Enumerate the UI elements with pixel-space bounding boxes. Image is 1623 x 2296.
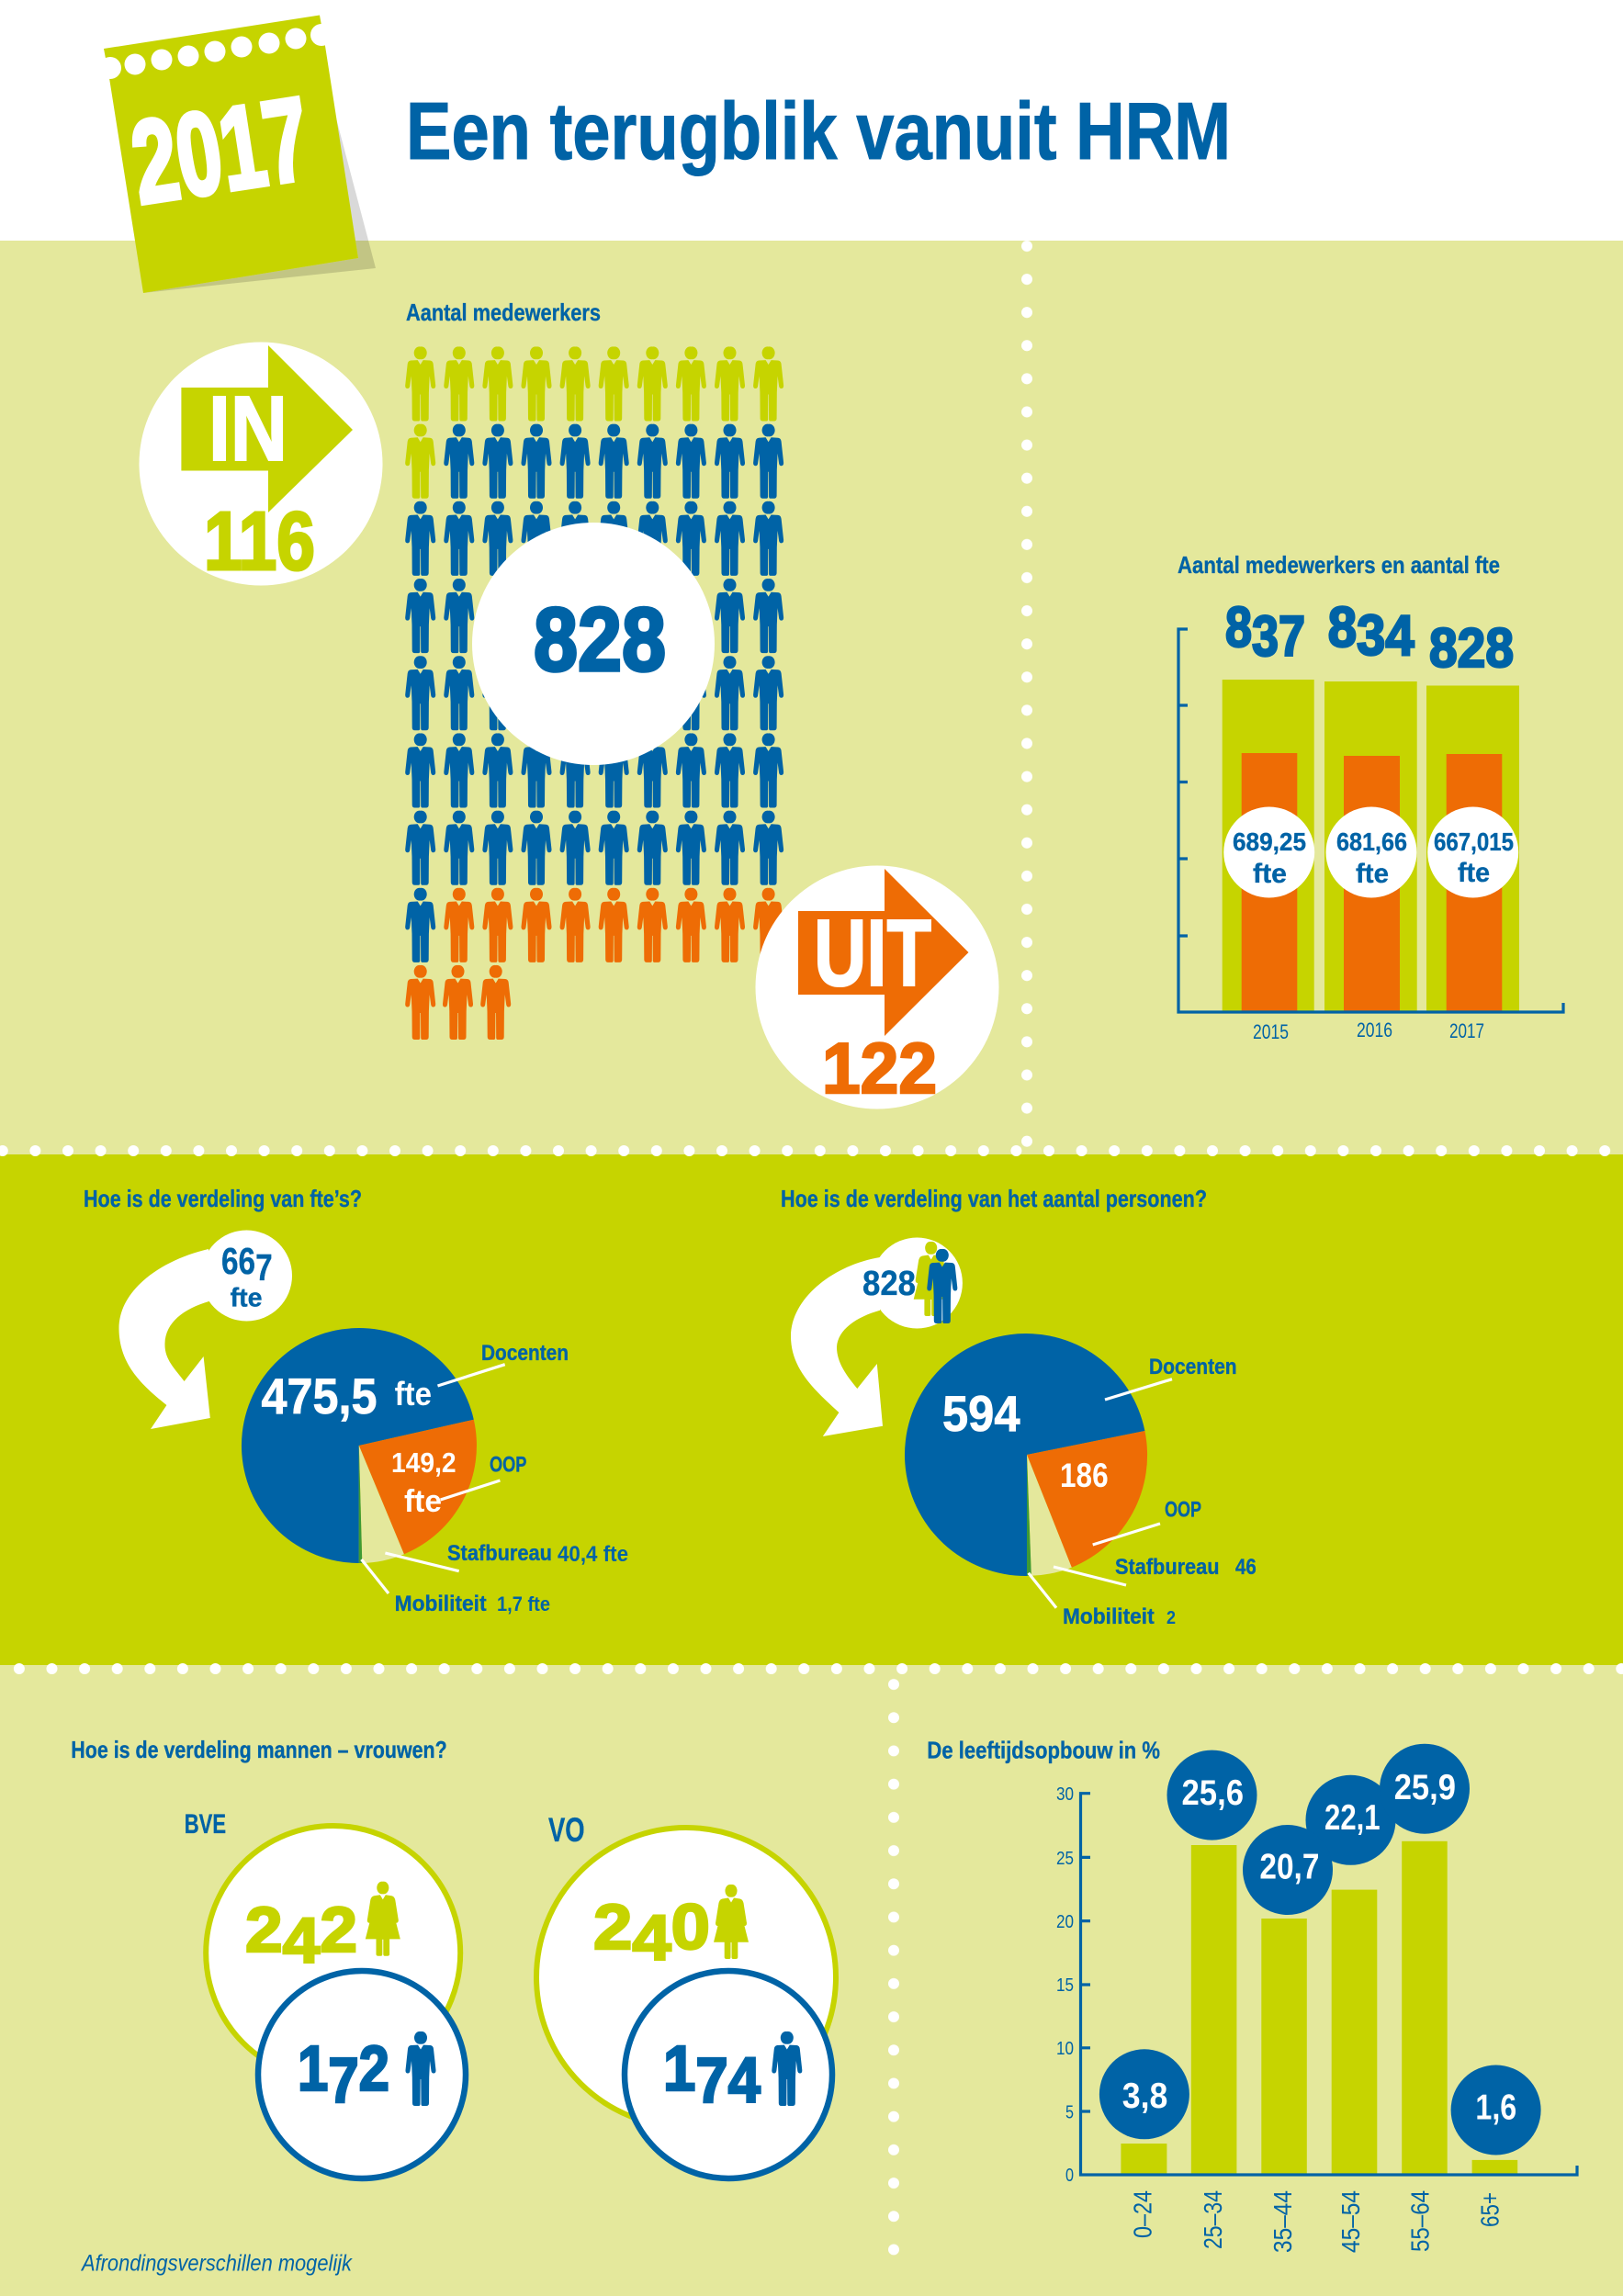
panel: instroom IN 116: IN xyxy=(209,377,287,480)
heading: verdeling personen: Hoe is de verdeling van het aantal personen? xyxy=(781,1185,1207,1212)
bar chart: medewerkers en fte 2015-2017: 828 xyxy=(1429,617,1514,679)
callout: totaal 828: 828 xyxy=(534,589,666,690)
bar chart: medewerkers en fte 2015-2017: 837 xyxy=(1225,596,1305,669)
bar chart: leeftijdsopbouw: 25,6 xyxy=(1181,1773,1244,1813)
bar chart: medewerkers en fte 2015-2017: fte xyxy=(1253,859,1287,889)
bar chart: leeftijdsopbouw: 65+ xyxy=(1475,2192,1504,2227)
heading: leeftijdsopbouw: De leeftijdsopbouw in % xyxy=(927,1736,1160,1763)
footnote: Afrondingsverschillen mogelijk xyxy=(80,2251,353,2277)
bar chart: leeftijdsopbouw: 5 xyxy=(1065,2103,1074,2123)
pie chart: verdeling personen: Docenten xyxy=(1149,1355,1237,1379)
callout: 828 personen with curved arrow xyxy=(791,1238,963,1436)
bar chart: leeftijdsopbouw: 0 xyxy=(1065,2166,1074,2186)
bar chart: leeftijdsopbouw: 0–24 xyxy=(1128,2190,1156,2238)
bar chart: leeftijdsopbouw: 25 xyxy=(1056,1849,1074,1869)
pie chart: verdeling fte: Docenten xyxy=(481,1341,569,1366)
bar chart: leeftijdsopbouw: 22,1 xyxy=(1324,1798,1381,1838)
pie chart: verdeling fte: Mobiliteit xyxy=(395,1592,487,1616)
pie chart: verdeling fte: fte xyxy=(404,1484,442,1519)
panel: instroom IN 116 xyxy=(140,342,382,588)
panel: BVE mannen vrouwen: 242 xyxy=(245,1894,357,1976)
callout: totaal 828 xyxy=(472,523,715,765)
pie chart: verdeling personen: 594 xyxy=(942,1385,1020,1442)
bar chart: medewerkers en fte 2015-2017: fte xyxy=(1458,858,1490,888)
pie chart: verdeling fte: 1,7 fte xyxy=(497,1593,550,1615)
bar chart: leeftijdsopbouw: 10 xyxy=(1056,2039,1074,2059)
heading: verdeling fte: Hoe is de verdeling van fte’s? xyxy=(84,1185,362,1212)
bar chart: leeftijdsopbouw: 3,8 xyxy=(1122,2077,1167,2116)
pie chart: verdeling fte: 40,4 fte xyxy=(558,1542,628,1567)
callout: 667 fte with curved arrow: 667 xyxy=(221,1240,273,1289)
pie chart: verdeling personen: 2 xyxy=(1167,1608,1176,1628)
bar chart: medewerkers en fte 2015-2017: 667,015 xyxy=(1434,827,1514,856)
bar chart: leeftijdsopbouw: 15 xyxy=(1056,1975,1074,1996)
heading: aantal medewerkers en aantal fte: Aantal medewerkers en aantal fte xyxy=(1178,551,1500,579)
bar chart: leeftijdsopbouw: 20 xyxy=(1056,1912,1074,1932)
panel: BVE mannen vrouwen xyxy=(185,1809,466,2178)
pie chart: verdeling personen: 186 xyxy=(1060,1457,1109,1494)
pie chart: verdeling personen: Mobiliteit xyxy=(1063,1604,1155,1629)
pie chart: verdeling fte xyxy=(242,1328,628,1616)
bar chart: leeftijdsopbouw xyxy=(1056,1744,1577,2253)
panel: BVE mannen vrouwen: BVE xyxy=(185,1809,226,1840)
pie chart: verdeling personen xyxy=(905,1334,1257,1629)
pie chart: verdeling personen: 46 xyxy=(1235,1555,1257,1580)
pie chart: verdeling fte: OOP xyxy=(490,1453,526,1478)
bar chart: leeftijdsopbouw: 35–44 xyxy=(1268,2190,1297,2253)
pie chart: verdeling fte: Stafbureau xyxy=(447,1541,552,1566)
pictogram grid: medewerkers xyxy=(405,346,783,1040)
panel: BVE mannen vrouwen: 172 xyxy=(298,2032,389,2116)
panel: uitstroom UIT 122 xyxy=(755,865,999,1109)
panel: VO mannen vrouwen: 240 xyxy=(593,1891,710,1974)
heading: aantal medewerkers: Aantal medewerkers xyxy=(406,298,601,326)
bar chart: leeftijdsopbouw: 55–64 xyxy=(1405,2190,1435,2252)
bar chart: medewerkers en fte 2015-2017: 689,25 xyxy=(1233,827,1306,856)
bar chart: medewerkers en fte 2015-2017: 2016 xyxy=(1357,1019,1392,1041)
heading: mannen vrouwen: Hoe is de verdeling mannen – vrouwen? xyxy=(71,1736,447,1763)
panel: VO mannen vrouwen xyxy=(536,1811,836,2178)
panel: VO mannen vrouwen: VO xyxy=(548,1811,585,1849)
bar chart: medewerkers en fte 2015-2017: 834 xyxy=(1328,596,1414,668)
bar chart: medewerkers en fte 2015-2017 xyxy=(1178,596,1563,1043)
bar chart: leeftijdsopbouw: 25,9 xyxy=(1394,1768,1456,1807)
pie chart: verdeling fte: 149,2 xyxy=(391,1446,456,1479)
title: Een terugblik vanuit HRM xyxy=(406,85,1231,176)
bar chart: leeftijdsopbouw: 45–54 xyxy=(1336,2190,1365,2253)
bar chart: leeftijdsopbouw: 1,6 xyxy=(1475,2088,1516,2127)
pie chart: verdeling fte: 475,5 xyxy=(261,1367,377,1424)
callout: 828 personen with curved arrow: 828 xyxy=(862,1265,916,1303)
pie chart: verdeling personen: Stafbureau xyxy=(1115,1555,1220,1580)
panel: uitstroom UIT 122: UIT xyxy=(814,900,931,1006)
panel: instroom IN 116: 116 xyxy=(204,496,315,588)
icon: calendar sheet 2017 xyxy=(99,15,376,293)
bar chart: medewerkers en fte 2015-2017: fte xyxy=(1356,859,1389,889)
bar chart: leeftijdsopbouw: 30 xyxy=(1056,1784,1074,1805)
bar chart: medewerkers en fte 2015-2017: 681,66 xyxy=(1336,827,1407,856)
pie chart: verdeling fte: fte xyxy=(395,1375,432,1412)
panel: VO mannen vrouwen: 174 xyxy=(663,2032,761,2116)
icon: calendar sheet 2017: 2017 xyxy=(124,73,318,230)
bar chart: medewerkers en fte 2015-2017: 2015 xyxy=(1253,1020,1289,1043)
pie chart: verdeling personen: OOP xyxy=(1165,1498,1201,1523)
callout: 667 fte with curved arrow xyxy=(118,1231,292,1429)
bar chart: leeftijdsopbouw: 20,7 xyxy=(1259,1847,1319,1886)
panel: uitstroom UIT 122: 122 xyxy=(822,1028,937,1109)
bar chart: medewerkers en fte 2015-2017: 2017 xyxy=(1449,1019,1484,1042)
bar chart: leeftijdsopbouw: 25–34 xyxy=(1199,2190,1227,2249)
callout: 667 fte with curved arrow: fte xyxy=(231,1284,263,1313)
